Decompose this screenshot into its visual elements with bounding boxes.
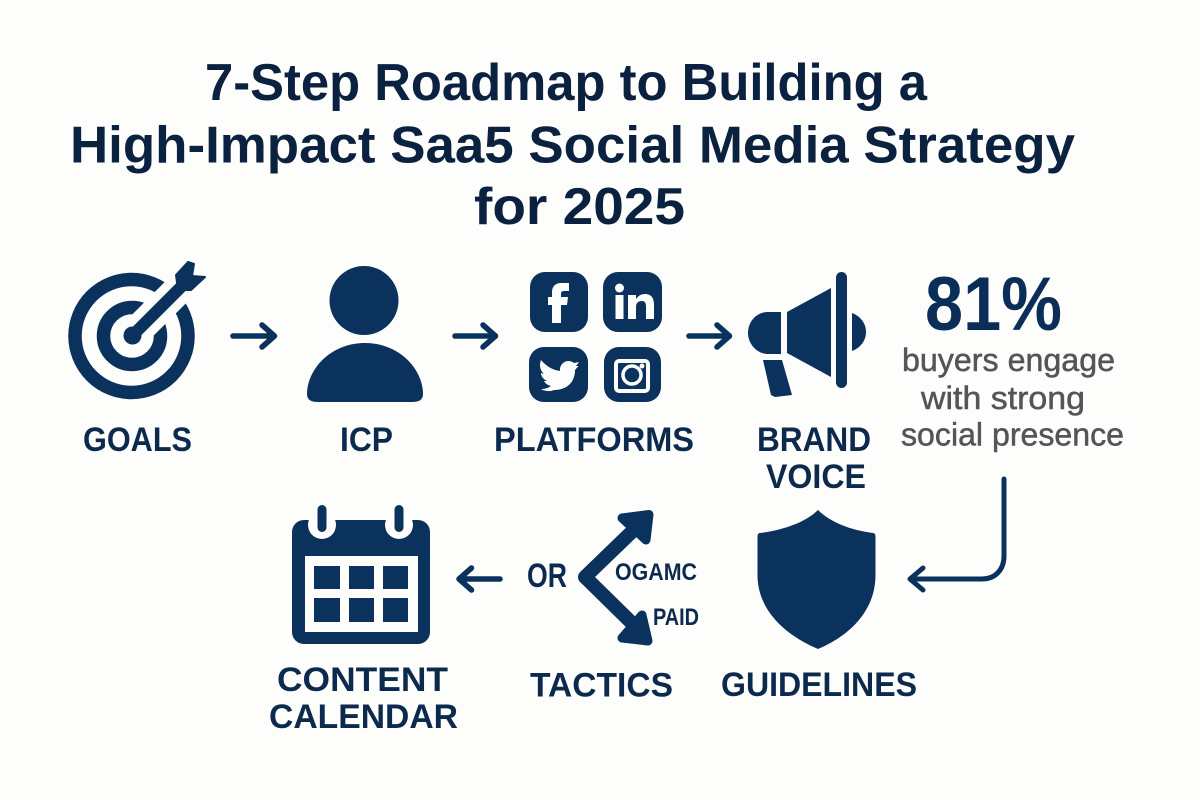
- callout text: social presence: [901, 416, 1124, 452]
- title: for 2025: [474, 178, 685, 236]
- callout text: with strong: [920, 380, 1085, 416]
- icon: instagram: [604, 347, 661, 402]
- tactics branch label: paid: PAID: [653, 604, 699, 631]
- arrow: callout to guidelines: [910, 479, 1004, 590]
- icon: linkedin: [603, 272, 662, 332]
- label: tactics: TACTICS: [530, 666, 673, 704]
- label: brand voice: [757, 421, 871, 496]
- label: content calendar: CONTENT: [277, 661, 448, 699]
- label: brand voice: VOICE: [766, 458, 866, 496]
- icon: facebook: [530, 272, 588, 332]
- tactics branch label: organic: OGAMC: [615, 559, 697, 586]
- statistic: 81%: 81%: [925, 262, 1062, 347]
- tactics branch label: or: OR: [527, 557, 567, 595]
- icon: social platforms: [529, 272, 662, 402]
- title: High-Impact Saa5 Social Media Strategy: [70, 116, 1075, 174]
- title: [70, 54, 1075, 236]
- icon: target with arrow: [75, 262, 205, 392]
- arrow: icp to platforms: [455, 325, 496, 347]
- icon: person: [307, 266, 423, 402]
- label: brand voice: BRAND: [757, 421, 871, 459]
- arrow: platforms to brand voice: [689, 325, 730, 347]
- icon: tactics split arrow: [585, 514, 649, 641]
- label: guidelines: GUIDELINES: [721, 666, 917, 704]
- arrow: goals to icp: [233, 325, 274, 347]
- arrow: tactics to content calendar: [459, 568, 500, 590]
- icon: twitter: [529, 347, 588, 402]
- callout text: buyers engage: [902, 342, 1115, 378]
- icon: calendar: [280, 500, 440, 644]
- label: content calendar: [269, 661, 458, 736]
- icon: megaphone: [748, 272, 866, 397]
- label: goals: GOALS: [83, 421, 192, 459]
- label: icp: ICP: [340, 421, 393, 459]
- callout text: [901, 342, 1124, 452]
- label: platforms: PLATFORMS: [494, 421, 694, 459]
- label: content calendar: CALENDAR: [269, 698, 458, 736]
- title: 7-Step Roadmap to Building a: [205, 54, 928, 112]
- icon: shield: [758, 510, 876, 649]
